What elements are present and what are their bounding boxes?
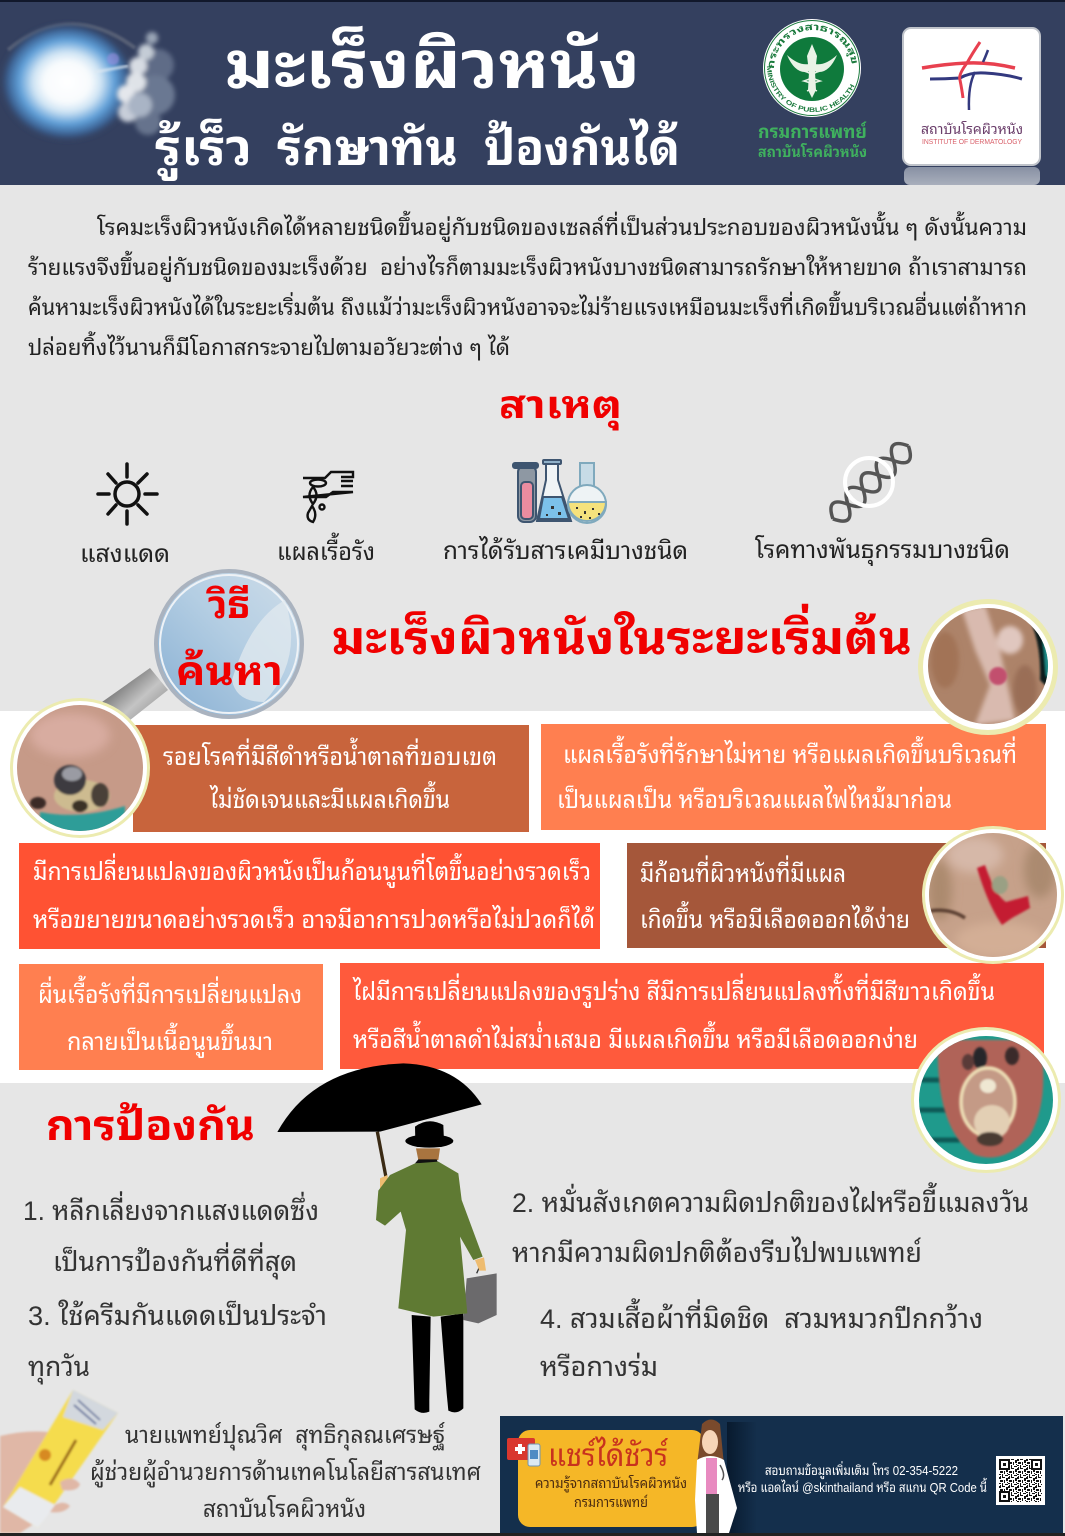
cause: chemicals	[443, 460, 688, 565]
icon: hand with drops	[303, 472, 353, 522]
sign box 6: หรือสีน้ำตาลดำไม่สม่ำเสมอ มีแผลเกิดขึ้น หรือมีเลือดออกง่าย	[353, 1020, 918, 1054]
photo: dark lesion left	[10, 698, 150, 840]
icon: DNA strand	[825, 438, 916, 527]
chemical particles	[546, 506, 600, 519]
subtitle: รักษาทัน	[277, 120, 458, 176]
sign box 5: กลายเป็นเนื้อนูนขึ้นมา	[67, 1022, 273, 1058]
contact text: หรือ แอดไลน์ @skinthailand หรือ สแกน QR Code นี้	[738, 1477, 987, 1495]
author credit: สถาบันโรคผิวหนัง	[203, 1494, 366, 1523]
intro paragraph: ร้ายแรงจึงขึ้นอยู่กับชนิดของมะเร็งด้วย อย่างไรก็ตามมะเร็งผิวหนังบางชนิดสามารถรักษาให้หายขาด ถ้าเราสามารถ	[28, 250, 1027, 283]
prevention list: left	[23, 1191, 327, 1384]
prevention list: right: หากมีความผิดปกติต้องรีบไปพบแพทย์	[512, 1236, 922, 1268]
sign box 4: เกิดขึ้น หรือมีเลือดออกได้ง่าย	[640, 900, 910, 934]
department name: สถาบันโรคผิวหนัง	[758, 142, 867, 161]
intro paragraph: ปล่อยทิ้งไว้นานก็มีโอกาสกระจายไปตามอวัยวะต่าง ๆ ได้	[28, 330, 510, 361]
logo: ministry of public health: MINISTRY OF PUBLIC HEALTH	[766, 66, 854, 112]
logo: institute of dermatology: INSTITUTE OF DERMATOLOGY	[922, 139, 1022, 146]
author credit: ผู้ช่วยผู้อำนวยการด้านเทคโนโลยีสารสนเทศ	[90, 1457, 481, 1488]
logo: ministry of public health: กระทรวงสาธารณสุข	[768, 24, 857, 68]
title: มะเร็งผิวหนัง	[225, 25, 640, 102]
yellow share label: แชร์ได้ชัวร์	[548, 1436, 668, 1473]
intro paragraph: ค้นหามะเร็งผิวหนังได้ในระยะเริ่มต้น ถึงแม้ว่ามะเร็งผิวหนังอาจจะไม่ร้ายแรงเหมือนมะเร็งที่เกิดขึ้นบริเวณอื่นแต่ถ้าหาก	[28, 290, 1027, 320]
subtitle	[155, 117, 680, 181]
sign box 6	[340, 963, 1044, 1069]
yellow share label	[518, 1430, 704, 1527]
department name: กรมการแพทย์	[758, 122, 867, 142]
illustration: doctor	[695, 1420, 737, 1533]
cause: chronic wound	[277, 472, 375, 566]
cause: sunlight	[80, 464, 170, 568]
photo: nail lesion	[911, 1027, 1061, 1173]
prevention list: right: หรือกางร่ม	[540, 1352, 658, 1382]
magnifying glass	[102, 571, 302, 728]
prevention list: left: 3. ใช้ครีมกันแดดเป็นประจำ	[28, 1300, 327, 1331]
sign box 5	[19, 964, 323, 1070]
illustration: man with umbrella	[277, 1063, 497, 1413]
footer banner	[500, 1416, 1063, 1533]
cause: chemicals: การได้รับสารเคมีบางชนิด	[443, 535, 688, 565]
sign box 5: ผื่นเรื้อรังที่มีการเปลี่ยนแปลง	[38, 975, 302, 1009]
sign box 3: มีการเปลี่ยนแปลงของผิวหนังเป็นก้อนนูนที่โตขึ้นอย่างรวดเร็ว	[33, 852, 591, 888]
bottom edge	[0, 1533, 1065, 1536]
white symptoms band	[0, 711, 1065, 1083]
heading: early stage skin cancer: มะเร็งผิวหนังในระยะเริ่มต้น	[332, 603, 912, 664]
intro paragraph	[28, 210, 1027, 361]
contact text: สอบถามข้อมูลเพิ่มเติม โทร 02-354-5222	[765, 1461, 958, 1479]
icon: medical kit	[507, 1438, 540, 1466]
sign box 2	[541, 724, 1046, 830]
cause: sunlight: แสงแดด	[80, 540, 170, 568]
magnifier words: วิธี	[205, 585, 250, 627]
magnifier words: ค้นหา	[176, 649, 283, 694]
sign box 3: หรือขยายขนาดอย่างรวดเร็ว อาจมีอาการปวดหรือไม่ปวดก็ได้	[33, 904, 595, 934]
contact text	[738, 1461, 987, 1495]
QR code	[996, 1456, 1045, 1505]
logo: institute of dermatology: สถาบันโรคผิวหนัง	[921, 121, 1023, 137]
prevention list: left: เป็นการป้องกันที่ดีที่สุด	[53, 1242, 297, 1279]
subtitle: รู้เร็ว	[155, 117, 252, 181]
header banner	[0, 0, 1065, 185]
sign box 4: มีก้อนที่ผิวหนังที่มีแผล	[640, 855, 846, 888]
logo: ministry of public health	[763, 19, 861, 117]
cause: genetic disease	[755, 438, 1010, 566]
sign box 6: ไฝมีการเปลี่ยนแปลงของรูปร่าง สีมีการเปลี่ยนแปลงทั้งที่มีสีขาวเกิดขึ้น	[352, 972, 995, 1008]
magnifier words	[176, 585, 283, 694]
photo: bleeding lesion	[922, 826, 1064, 964]
cause: genetic disease: โรคทางพันธุกรรมบางชนิด	[755, 535, 1010, 566]
sign box 1: ไม่ชัดเจนและมีแผลเกิดขึ้น	[209, 780, 450, 814]
icon: lab glassware	[513, 460, 606, 523]
photo: skin lesion top right	[918, 599, 1058, 735]
image: hand holding sunscreen tube	[0, 1390, 118, 1533]
author credit: นายแพทย์ปุณวิศ สุทธิกุลณเศรษฐ์	[125, 1421, 445, 1451]
cause: chronic wound: แผลเรื้อรัง	[277, 532, 375, 566]
intro paragraph: โรคมะเร็งผิวหนังเกิดได้หลายชนิดขึ้นอยู่กับชนิดของเซลล์ที่เป็นส่วนประกอบของผิวหนังนั้น ๆ ดังนั้นความ	[97, 210, 1027, 243]
prevention list: right	[512, 1182, 1029, 1382]
sun and cloud image	[0, 22, 175, 142]
department name	[758, 122, 867, 161]
yellow share label: กรมการแพทย์	[574, 1494, 648, 1510]
prevention list: left: 1. หลีกเลี่ยงจากแสงแดดซึ่ง	[23, 1191, 319, 1226]
sign box 1	[133, 725, 529, 832]
heading: prevention: การป้องกัน	[46, 1101, 255, 1149]
heading: causes: สาเหตุ	[499, 385, 622, 431]
sign box 4	[627, 843, 1046, 948]
prevention list: right: 2. หมั่นสังเกตความผิดปกติของไฝหรือขี้แมลงวัน	[512, 1182, 1029, 1218]
author credit	[90, 1421, 481, 1523]
logo: institute of dermatology	[903, 28, 1040, 185]
sign box 1: รอยโรคที่มีสีดำหรือน้ำตาลที่ขอบเขต	[163, 737, 497, 771]
sign box 2: เป็นแผลเป็น หรือบริเวณแผลไฟไหม้มาก่อน	[557, 784, 952, 814]
sign box 3	[19, 843, 600, 949]
yellow share label: ความรู้จากสถาบันโรคผิวหนัง	[535, 1475, 687, 1493]
prevention list: left: ทุกวัน	[28, 1352, 90, 1384]
prevention list: right: 4. สวมเสื้อผ้าที่มิดชิด สวมหมวกปีกกว้าง	[540, 1298, 983, 1334]
subtitle: ป้องกันได้	[484, 118, 680, 176]
icon: sun	[98, 464, 157, 524]
sign box 2: แผลเรื้อรังที่รักษาไม่หาย หรือแผลเกิดขึ้นบริเวณที่	[563, 735, 1017, 769]
